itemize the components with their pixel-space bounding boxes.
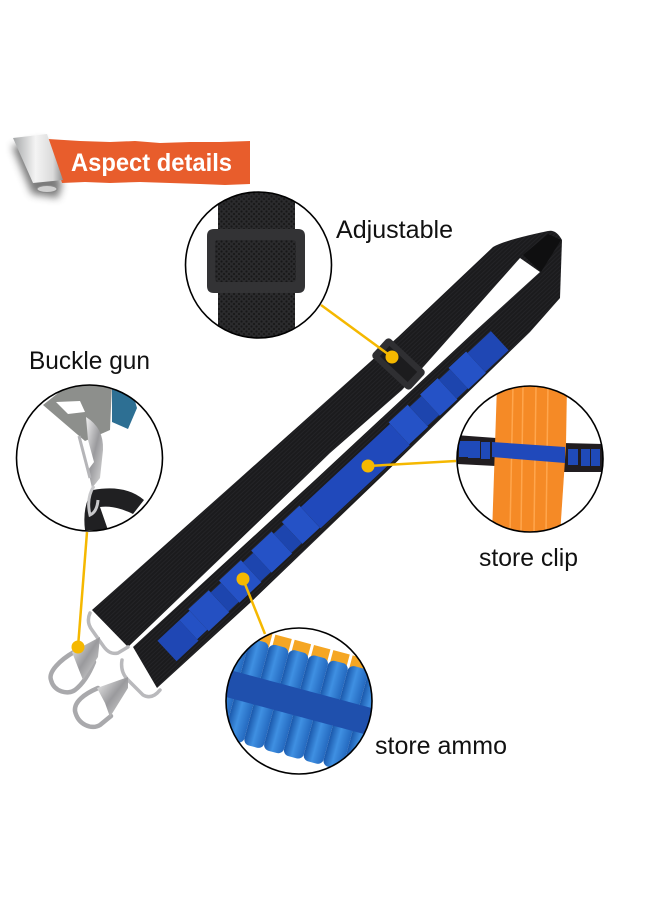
connector: store ammo — [236, 572, 265, 634]
callout circle: buckle gun detail — [16, 384, 162, 531]
buckle opening with webbing — [215, 240, 296, 282]
label: store ammo: store ammo — [375, 732, 507, 760]
black strap loop — [84, 488, 144, 530]
label: Buckle gun: Buckle gun — [29, 347, 150, 375]
rail slot — [56, 401, 85, 414]
label: Adjustable: Adjustable — [336, 216, 453, 244]
flat blue band — [301, 424, 410, 528]
snap hook body — [86, 417, 103, 488]
orange torn banner — [48, 139, 250, 185]
peeled paper roll — [13, 134, 63, 183]
dark blue elastic band — [227, 671, 371, 734]
callout circle: adjustable detail — [186, 190, 332, 340]
strap body — [92, 231, 562, 688]
strap fold at top — [523, 234, 561, 272]
heading text: Aspect details — [71, 149, 232, 177]
clip ribs — [510, 386, 548, 532]
blue retaining band — [492, 442, 565, 463]
roll end — [37, 186, 57, 192]
hook gate — [79, 436, 90, 478]
heading banner: Aspect details — [12, 134, 250, 198]
lower blue ammo pockets — [156, 329, 510, 662]
roll shadow — [12, 140, 62, 198]
webbing strap — [218, 190, 295, 340]
teal gun part — [112, 390, 137, 429]
plastic buckle — [207, 229, 305, 293]
lower snap hook — [75, 660, 160, 727]
upper snap hook — [51, 613, 128, 692]
connector: adjustable — [321, 305, 398, 364]
blue pockets on strap — [459, 441, 600, 466]
shoulder strap product — [51, 231, 562, 727]
orange magazine clip — [492, 385, 567, 535]
metal gun rail — [43, 384, 112, 441]
callout circle: store ammo detail — [225, 627, 373, 775]
label: store clip: store clip — [479, 544, 578, 572]
orange dart tips — [259, 634, 364, 669]
connector: store clip — [362, 460, 456, 472]
hook ring — [89, 486, 98, 515]
slide buckle on strap — [371, 337, 426, 391]
connector: buckle gun — [72, 532, 87, 654]
foam dart bodies — [226, 640, 372, 767]
black strap behind clip — [456, 435, 496, 466]
callout circle: store clip detail — [456, 385, 604, 535]
